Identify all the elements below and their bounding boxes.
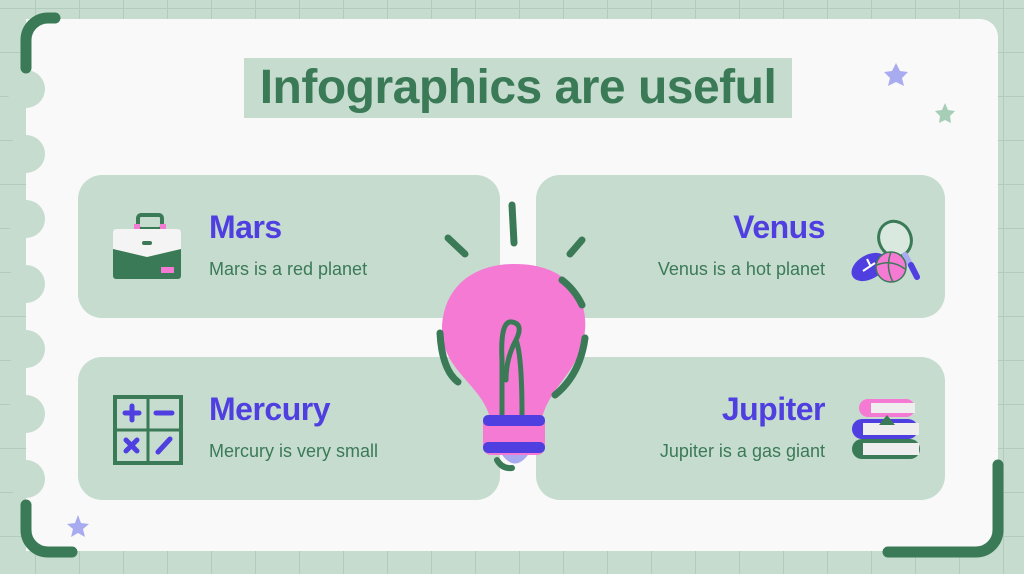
icon: books — [852, 399, 920, 459]
card: Venus: Venus — [733, 209, 825, 245]
card: Mercury: Mercury — [209, 391, 330, 427]
stars — [884, 63, 955, 123]
scalloped left edge — [8, 70, 45, 498]
card: Mercury: Mercury is very small — [209, 441, 378, 461]
card: Mars: Mars is a red planet — [209, 259, 367, 279]
card: Mars — [78, 175, 500, 318]
title: Infographics are useful — [260, 61, 776, 114]
card: Jupiter: Jupiter — [722, 391, 825, 427]
card: Venus: Venus is a hot planet — [658, 259, 825, 279]
card: Mercury — [78, 357, 500, 500]
icon: briefcase — [113, 213, 181, 279]
card: Jupiter — [536, 357, 945, 500]
card: Jupiter: Jupiter is a gas giant — [660, 441, 825, 461]
card: Mars: Mars — [209, 209, 282, 245]
icon: calculator — [113, 395, 183, 465]
star bottom left — [67, 515, 89, 537]
lightbulb — [436, 202, 588, 472]
card: Venus — [536, 175, 945, 318]
icon: sports — [852, 220, 920, 283]
